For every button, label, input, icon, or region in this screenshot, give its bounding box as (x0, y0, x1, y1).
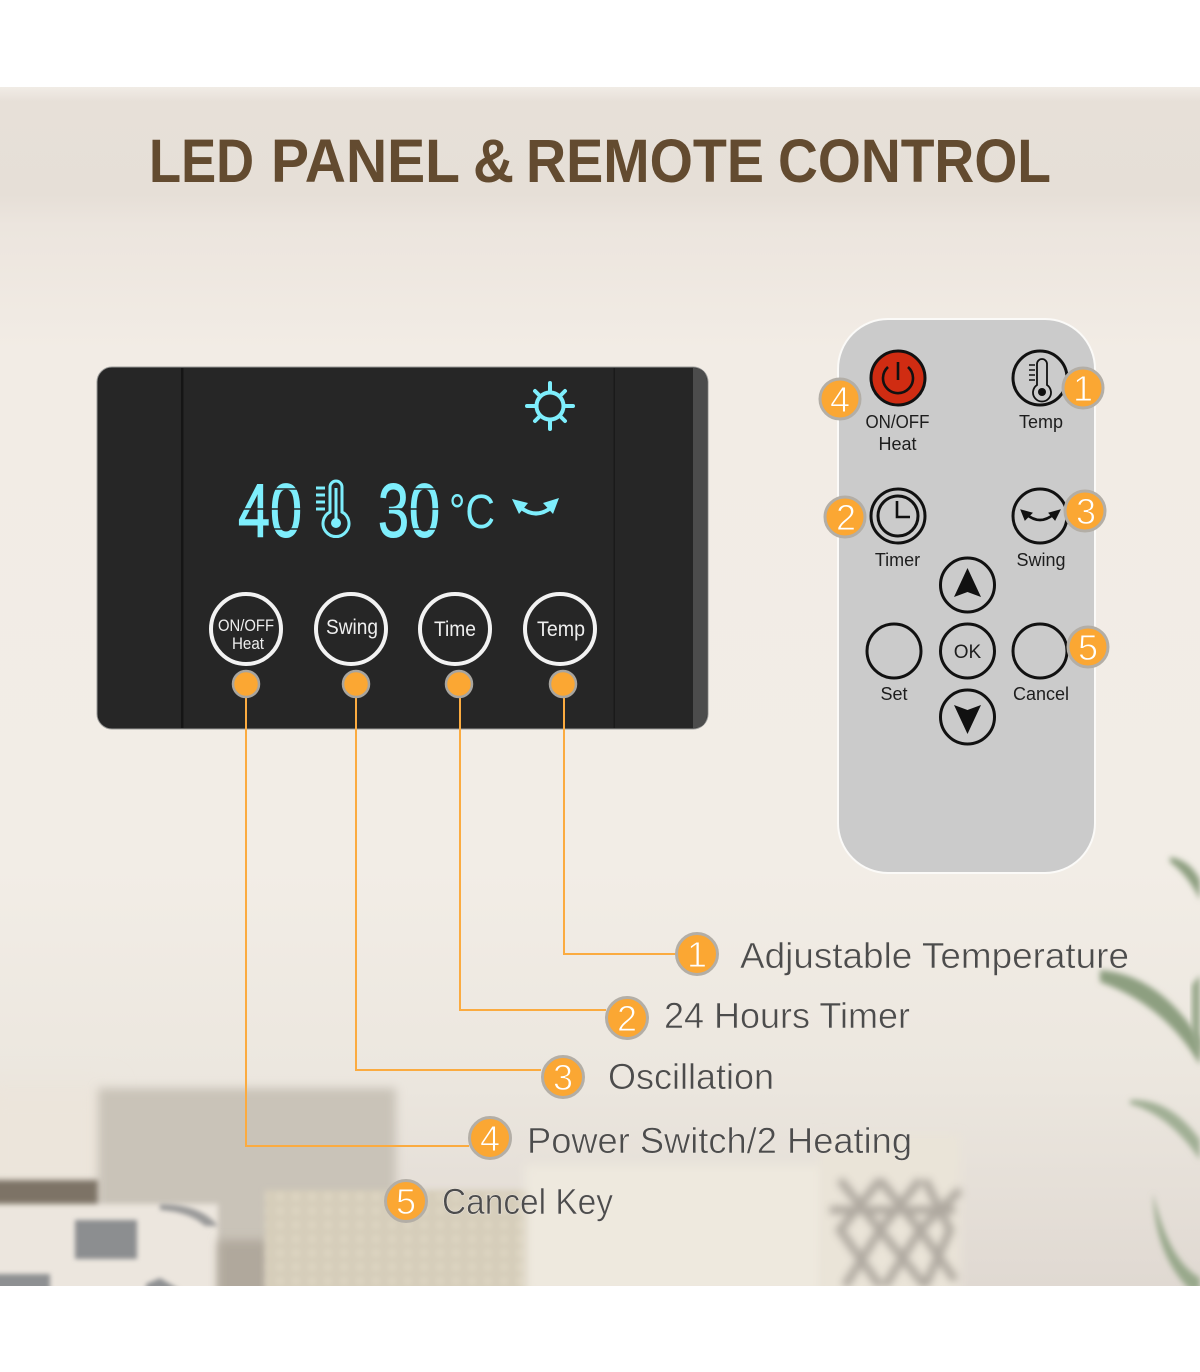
icon: sun heating indicator (527, 383, 573, 429)
title: REMOTE (526, 127, 764, 195)
button: Set: Set (880, 684, 908, 704)
icon: thermometer (316, 481, 349, 537)
legend item 3: Oscillation (608, 1056, 774, 1097)
button: power ON/OFF Heat: Heat (878, 434, 917, 454)
button: down arrow (940, 690, 994, 744)
button: Timer (871, 489, 925, 570)
title: CONTROL (778, 127, 1051, 195)
legend item 2: 24 Hours Timer (664, 995, 910, 1036)
panel: LED control panel (97, 367, 708, 729)
connector lines from panel to legend (246, 698, 676, 1146)
button: Cancel (1013, 624, 1069, 704)
button: power ON/OFF Heat: ON/OFF (866, 412, 930, 432)
button: Time: Time (434, 618, 476, 641)
legend item 5: Cancel Key (442, 1181, 613, 1222)
remote number badges: 2 (836, 497, 856, 538)
remote number badges: 4 (830, 379, 850, 420)
legend item 1: 1 (687, 934, 707, 975)
title: PANEL (271, 127, 460, 195)
legend item 1: Adjustable Temperature (740, 935, 1129, 976)
LED temperature reading 40: 40 (238, 469, 302, 554)
remote number badges (820, 368, 1108, 668)
button: up arrow (940, 558, 994, 612)
title (149, 127, 1051, 195)
remote number badges: 5 (1078, 627, 1098, 668)
button: ON/OFF Heat: ON/OFF (218, 616, 274, 635)
icon: swing arrow (512, 498, 559, 514)
button: Time (420, 594, 490, 664)
button: power ON/OFF Heat (866, 351, 930, 454)
title: & (473, 127, 514, 195)
button: Swing (316, 594, 386, 664)
degrees Celsius unit: °C (449, 486, 495, 539)
remote number badges: 3 (1076, 491, 1096, 532)
button: Swing: Swing (1016, 550, 1066, 570)
legend item 4: Power Switch/2 Heating (527, 1120, 912, 1161)
legend item 3: 3 (553, 1057, 573, 1098)
legend item 5: 5 (396, 1181, 416, 1222)
panel: remote control (838, 319, 1095, 873)
legend item 2: 2 (617, 998, 637, 1039)
button: ON/OFF Heat: Heat (232, 634, 264, 653)
button: Temp (1013, 351, 1067, 432)
button: OK (940, 624, 994, 678)
legend item 3 (542, 1056, 774, 1098)
button: Temp: Temp (537, 618, 585, 641)
remote number badges: 1 (1073, 368, 1093, 409)
LED temperature reading 30: 30 (378, 469, 440, 554)
button: Cancel: Cancel (1013, 684, 1069, 704)
button: Temp (525, 594, 595, 664)
legend item 4: 4 (480, 1118, 500, 1159)
title: LED (149, 127, 254, 195)
button: Temp: Temp (1019, 412, 1063, 432)
panel indicator dots (233, 671, 576, 697)
button: OK: OK (954, 642, 982, 663)
button: Swing: Swing (326, 616, 378, 639)
button: Swing (1013, 489, 1067, 570)
button: Set (867, 624, 921, 704)
button: ON/OFF Heat (211, 594, 281, 664)
button: Timer: Timer (875, 550, 920, 570)
